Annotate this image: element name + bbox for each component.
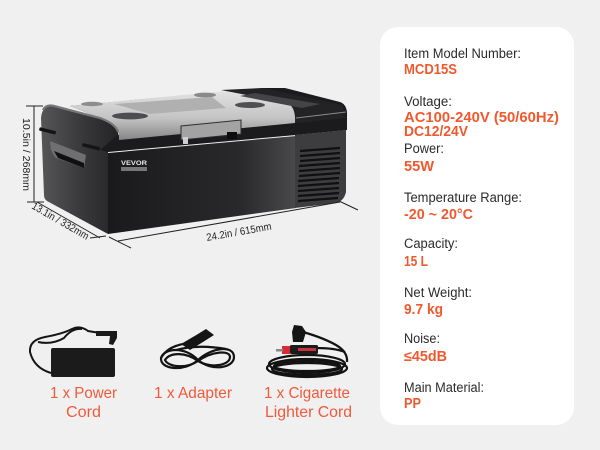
- lid rim at left: [43, 106, 118, 132]
- accessory labels: 1 x Cigarette: [264, 385, 350, 402]
- spec: temperature range: Temperature Range:: [404, 190, 522, 205]
- right dark lid panel: [221, 88, 346, 123]
- spec: temperature range: [404, 190, 522, 223]
- spec: noise: [404, 331, 447, 365]
- left handle: [50, 141, 86, 168]
- accessory: power cord: [30, 327, 117, 377]
- accessory: adapter: [161, 329, 234, 368]
- spec: main material: Main Material:: [404, 380, 484, 395]
- spec: main material: [404, 380, 484, 412]
- accessory labels: [50, 385, 352, 421]
- fridge left side face: [41, 105, 118, 234]
- fridge front body: [108, 136, 296, 234]
- brand label: [121, 160, 148, 171]
- lid recesses: [81, 102, 103, 106]
- spec: power: 55W: [404, 159, 434, 175]
- spec: power: Power:: [404, 141, 444, 156]
- spec: power: [404, 141, 444, 175]
- spec: temperature range: -20 ~ 20°C: [404, 207, 474, 223]
- spec: net weight: Net Weight:: [404, 285, 472, 300]
- accessory labels: 1 x Power: [50, 385, 118, 402]
- spec: noise: ≤45dB: [404, 349, 447, 365]
- accessory labels: 1 x Adapter: [154, 385, 233, 402]
- spec: voltage: [404, 94, 559, 140]
- fridge dark lid band and rear: [70, 88, 347, 152]
- spec: capacity: Capacity:: [404, 236, 458, 251]
- front latch: [181, 120, 241, 140]
- dimension: width: [109, 201, 358, 248]
- dimension: width: 24.2in / 615mm: [205, 221, 273, 244]
- spec: noise: Noise:: [404, 331, 440, 346]
- brand label: VEVOR: [121, 160, 148, 167]
- spec: net weight: [404, 285, 472, 318]
- spec: model number: [404, 46, 521, 78]
- spec: main material: PP: [404, 396, 421, 412]
- grey lid top: [70, 91, 295, 140]
- accessory labels: Lighter Cord: [265, 404, 352, 421]
- dimension: depth: 13.1in / 332mm: [30, 200, 91, 243]
- spec: model number: MCD15S: [404, 62, 457, 78]
- spec: capacity: 15 L: [404, 254, 428, 270]
- dimension: height: [20, 106, 44, 202]
- dimension: height: 10.5in / 268mm: [20, 118, 32, 191]
- accessory: cigarette lighter cord: [267, 325, 347, 377]
- spec: voltage: AC100-240V (50/60Hz): [404, 110, 559, 126]
- spec: voltage: DC12/24V: [404, 124, 468, 140]
- spec: capacity: [404, 236, 458, 270]
- spec: net weight: 9.7 kg: [404, 302, 443, 318]
- accessory labels: Cord: [66, 404, 101, 421]
- compressor compartment: [295, 130, 346, 208]
- panel: specifications: [380, 27, 574, 425]
- product: portable fridge: [39, 88, 347, 234]
- spec: model number: Item Model Number:: [404, 46, 521, 61]
- spec: voltage: Voltage:: [404, 94, 452, 109]
- compressor vent grille: [298, 148, 340, 201]
